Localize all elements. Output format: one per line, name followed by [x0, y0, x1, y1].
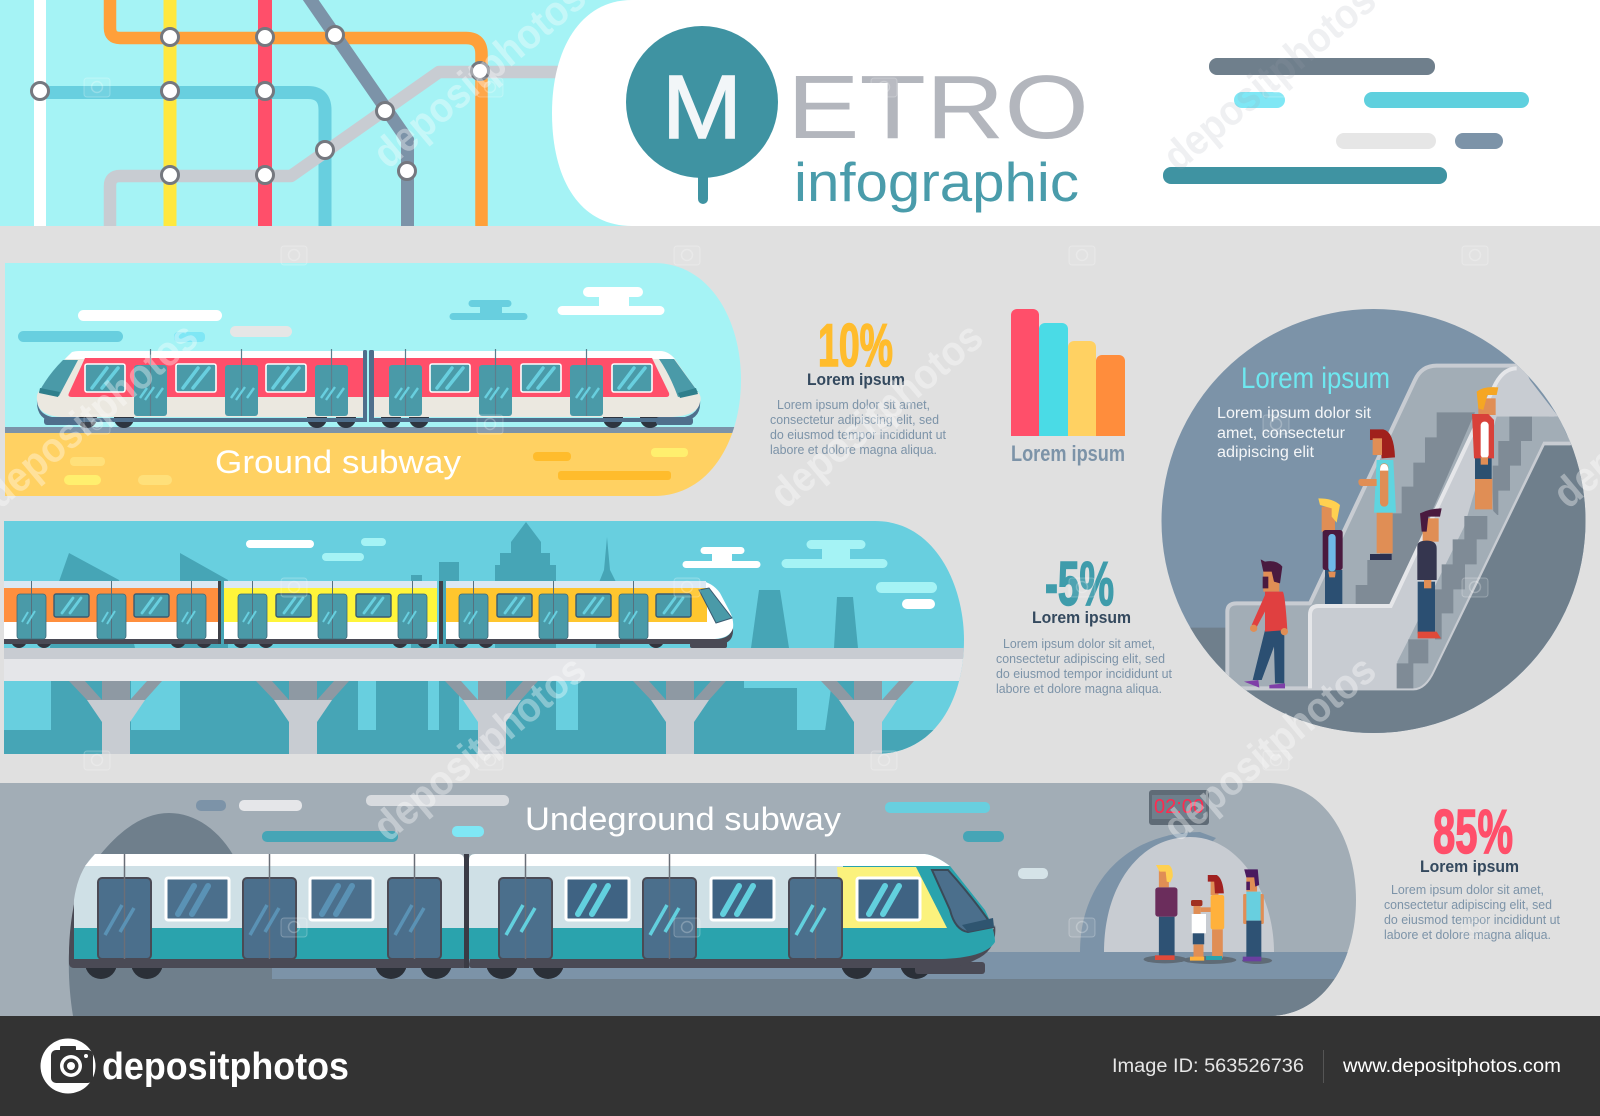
person: woman [1358, 429, 1396, 560]
panel: elevated subway [0, 518, 970, 758]
stat: -5% [996, 550, 1173, 696]
text: escalator [1217, 405, 1372, 461]
clouds [246, 538, 937, 609]
watermark: depositphotos [364, 645, 594, 850]
stat: -5%: Lorem ipsum dolor sit amet, [1003, 637, 1155, 651]
subtitle: infographic [794, 151, 1079, 213]
person: child [1190, 900, 1206, 961]
stat: 10%: Lorem ipsum dolor sit amet, [777, 398, 930, 412]
bar chart: Lorem ipsum [1011, 441, 1125, 466]
stat: 10%: consectetur adipiscing elit, sed [770, 413, 939, 427]
escalator back stairs [1356, 412, 1475, 604]
station clock: 02:00 [1154, 796, 1204, 818]
stat: 85%: 85% [1433, 798, 1513, 867]
ground bars [64, 448, 688, 485]
skyline [0, 522, 970, 756]
footer url: www.depositphotos.com [1342, 1056, 1561, 1077]
text: escalator: Lorem ipsum dolor sit [1217, 405, 1372, 422]
stat: -5%: labore et dolore magna aliqua. [996, 682, 1162, 696]
bar chart [1011, 309, 1125, 466]
title: metro [626, 26, 1089, 204]
stat: 85% [1384, 798, 1561, 942]
person: man in purple [1155, 865, 1177, 960]
escalator front stairs [1397, 417, 1532, 688]
stat: -5%: -5% [1045, 550, 1114, 619]
stat: 10%: 10% [818, 312, 893, 379]
panel: header [552, 0, 1600, 226]
person: man in shorts [1472, 387, 1498, 515]
train: orange and yellow [4, 581, 733, 648]
line: yellow [164, 0, 176, 226]
heading: underground subway: Undeground subway [525, 801, 841, 837]
stat: 10%: Lorem ipsum [807, 370, 905, 389]
train: teal [69, 854, 995, 979]
panel: escalator circle [1162, 309, 1586, 733]
platform [272, 952, 1362, 1019]
escalator mid band [1397, 417, 1570, 688]
stat: -5%: consectetur adipiscing elit, sed [996, 652, 1165, 666]
decorative header bars [1163, 58, 1529, 184]
heading: ground subway: Ground subway [215, 444, 461, 480]
escalator front balustrade [1310, 368, 1558, 688]
train: red [37, 345, 701, 428]
person: bearded man [1244, 559, 1288, 688]
viaduct deck [0, 648, 970, 681]
heading: escalator: Lorem ipsum [1241, 362, 1390, 395]
station clock [1149, 790, 1209, 825]
people waiting [1144, 865, 1272, 964]
escalator back [1227, 366, 1570, 688]
panel: ground subway [0, 260, 745, 499]
person: man in cyan [1243, 869, 1264, 961]
panel: underground subway [0, 780, 1362, 1020]
text: escalator: adipiscing elit [1217, 444, 1315, 461]
stat: -5%: Lorem ipsum [1032, 608, 1131, 627]
stat: 10%: labore et dolore magna aliqua. [770, 443, 937, 457]
footer image id: Image ID: 563526736 [1112, 1056, 1304, 1077]
footer band [0, 1016, 1600, 1116]
title: metro: ETRO [787, 58, 1089, 158]
station arch [1080, 832, 1274, 952]
line: orange [110, 0, 482, 226]
watermark camera marks [84, 78, 1488, 937]
text: escalator: amet, consectetur [1217, 425, 1345, 442]
stat: 10%: do eiusmod tempor incididunt ut [770, 428, 947, 442]
tunnel mouth [69, 813, 1360, 1016]
line: grey [110, 72, 560, 226]
watermark: depositphotos [761, 312, 991, 517]
icon: camera logo [40, 1038, 96, 1094]
stat: 85%: consectetur adipiscing elit, sed [1384, 898, 1552, 912]
title: metro: M [662, 58, 742, 158]
panel: metro map [0, 0, 700, 226]
line: white [34, 0, 46, 226]
line: blue [40, 92, 325, 226]
stat: -5%: do eiusmod tempor incididunt ut [996, 667, 1173, 681]
clouds [196, 795, 1048, 879]
viaduct pillars [69, 681, 914, 754]
icon: metro pin [626, 26, 778, 204]
footer logo text: depositphotos [102, 1046, 349, 1088]
stat: 10% [770, 312, 947, 457]
person: blond man [1318, 498, 1343, 605]
stations [32, 26, 488, 184]
floor [1190, 442, 1586, 733]
person: dark-haired man [1417, 508, 1442, 638]
clouds [18, 287, 664, 342]
stat: 85%: Lorem ipsum dolor sit amet, [1391, 883, 1544, 897]
watermark: depositphotos [1154, 645, 1384, 850]
stat: 85%: labore et dolore magna aliqua. [1384, 928, 1551, 942]
person: woman in orange [1201, 875, 1224, 960]
stat: 85%: do eiusmod tempor incididunt ut [1384, 913, 1561, 927]
stat: 85%: Lorem ipsum [1420, 857, 1519, 876]
line: slate [308, 0, 408, 226]
watermark [0, 0, 1600, 850]
line: red [258, 0, 272, 226]
